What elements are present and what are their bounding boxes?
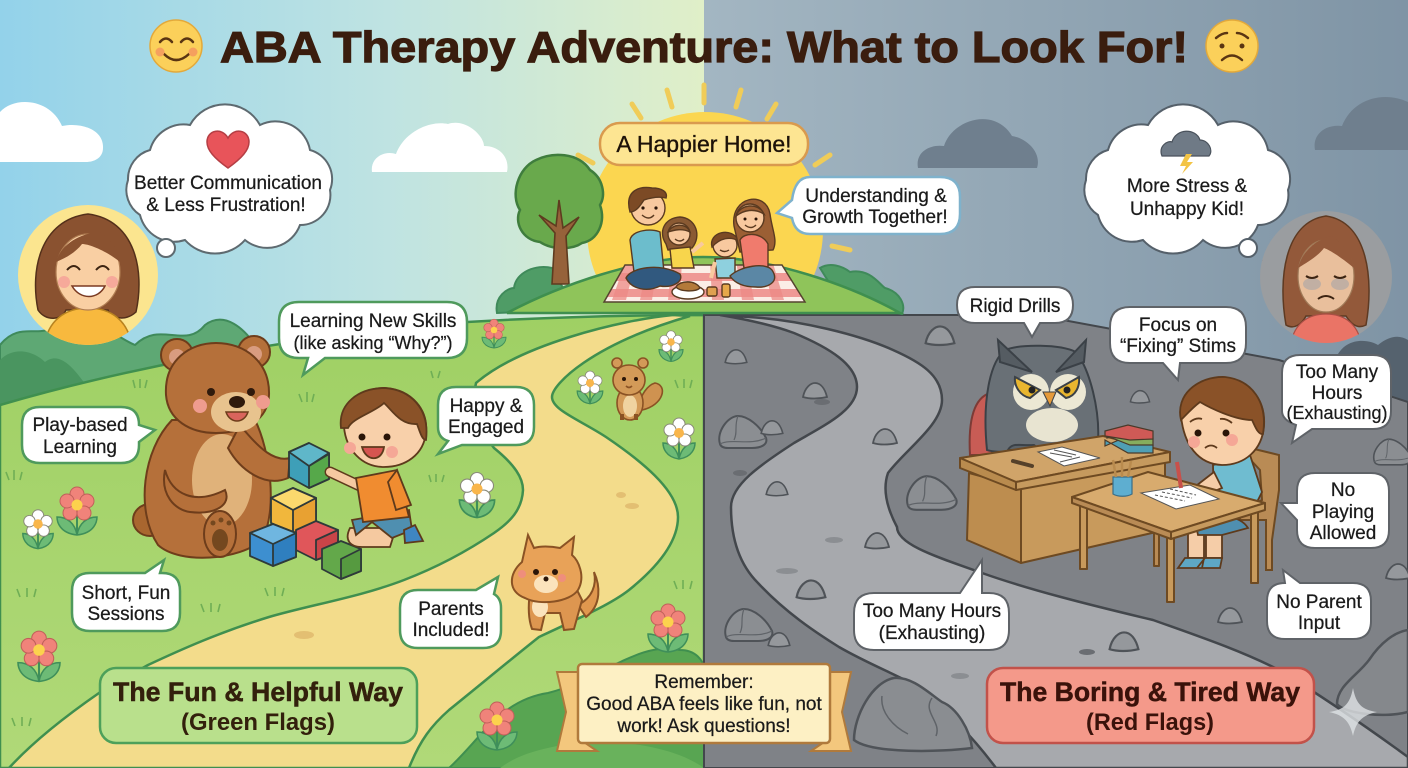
cloud: grey right	[1315, 97, 1408, 150]
speech bubble: Too Many Hours (Exhausting) right	[1282, 355, 1391, 443]
character: stern owl	[986, 340, 1098, 452]
thought bubble: Better Communication: Better Communication	[134, 173, 322, 194]
banner: Remember callout: work! Ask questions!	[616, 716, 791, 737]
thought bubble: Better Communication: & Less Frustration!	[146, 195, 306, 216]
speech bubble: No Parent Input	[1267, 570, 1371, 639]
label: red flags: (Red Flags)	[1086, 709, 1214, 736]
speech bubble: Play-based Learning	[22, 407, 155, 463]
speech bubble: Too Many Hours (Exhausting) centre	[854, 560, 1009, 650]
icon: storm cloud	[1161, 131, 1211, 174]
speech bubble: No Playing Allowed: Playing	[1312, 502, 1374, 523]
speech bubble: Too Many Hours (Exhausting) right: Too Many	[1296, 362, 1379, 383]
speech bubble: No Parent Input: No Parent	[1276, 592, 1362, 613]
banner: A Happier Home!: A Happier Home!	[616, 131, 792, 157]
speech bubble: Understanding & Growth Together!: Understanding &	[805, 186, 947, 207]
rock: large bottom right	[1337, 630, 1408, 715]
mother	[730, 199, 775, 287]
tree	[516, 155, 603, 284]
speech bubble: Short, Fun Sessions	[72, 560, 180, 631]
speech bubble: No Playing Allowed	[1281, 473, 1389, 548]
speech bubble: Too Many Hours (Exhausting) centre: (Exhausting)	[879, 623, 985, 644]
little boy	[711, 232, 739, 278]
ground: green meadow	[0, 315, 704, 768]
thought bubble: More Stress: More Stress &	[1127, 176, 1248, 197]
papers and pencil on desk	[1013, 447, 1100, 466]
family picnic	[626, 188, 775, 299]
ground: stony grey ground	[704, 315, 1408, 768]
cloud: large white left	[0, 102, 103, 162]
small student chair	[1240, 447, 1279, 570]
bushes: left background	[0, 316, 300, 420]
icon: worried emoji	[1206, 20, 1258, 72]
thought bubble: More Stress	[1084, 104, 1290, 267]
speech bubble: Learning New Skills	[279, 302, 467, 375]
speech bubble: Understanding & Growth Together!	[777, 177, 960, 234]
speech bubble: No Parent Input: Input	[1298, 613, 1341, 634]
flowers on the meadow	[18, 319, 695, 750]
character: brown bear	[133, 336, 290, 558]
speech bubble: Play-based Learning: Learning	[43, 437, 117, 458]
girl	[662, 217, 703, 268]
picnic food	[672, 282, 730, 299]
speech bubble: Play-based Learning: Play-based	[32, 415, 128, 436]
path: yellow sandy road	[9, 315, 690, 768]
speech bubble: Too Many Hours (Exhausting) right: Hours	[1312, 383, 1362, 404]
speech bubble: Learning New Skills: Learning New Skills	[290, 311, 456, 332]
background: sunny sky	[0, 0, 704, 768]
cloud: grey centre	[918, 119, 1038, 168]
speech bubble: Parents Included!: Included!	[412, 620, 490, 641]
label: red flags	[987, 668, 1314, 743]
speech bubble: No Playing Allowed: Allowed	[1310, 523, 1376, 544]
speech bubble: Focus on "Fixing" Stims: “Fixing” Stims	[1120, 336, 1236, 357]
speech bubble: Understanding & Growth Together!: Growth Together!	[802, 207, 948, 228]
speech bubble: No Playing Allowed: No	[1331, 480, 1355, 501]
portrait: sad mom	[1260, 211, 1392, 350]
icon: smiling emoji	[150, 20, 202, 72]
banner: Remember callout: Remember:	[654, 672, 754, 693]
stack of books	[1105, 425, 1153, 453]
character: happy boy	[330, 388, 427, 547]
background: stormy sky	[704, 0, 1408, 768]
speech bubble: Happy & Engaged	[438, 387, 534, 454]
hill: bushes behind hilltop	[497, 265, 903, 314]
thought bubble: More Stress: Unhappy Kid!	[1130, 199, 1244, 220]
banner: Remember callout: Good ABA feels like fun, not	[586, 694, 822, 715]
speech bubble: Too Many Hours (Exhausting) centre: Too Many Hours	[863, 601, 1001, 622]
sun and rays	[576, 82, 852, 275]
bushes: bottom right of meadow	[449, 648, 704, 768]
speech bubble: Focus on "Fixing" Stims: Focus on	[1139, 315, 1217, 336]
icon: red heart	[207, 131, 249, 168]
small student desk	[1072, 472, 1265, 602]
cloud: white centre	[372, 123, 508, 172]
speech bubble: Rigid Drills: Rigid Drills	[970, 296, 1060, 317]
title: ABA Therapy Adventure: What to Look For!	[220, 23, 1188, 72]
thought bubble: Better Communication	[126, 104, 332, 268]
picnic blanket	[600, 260, 810, 302]
rocks and pebbles on the stony path	[719, 326, 1408, 679]
rock: large bottom centre	[854, 678, 972, 751]
sparkle watermark	[1329, 688, 1377, 736]
speech bubble: Short, Fun Sessions: Sessions	[87, 604, 165, 625]
label: red flags: The Boring & Tired Way	[1000, 677, 1300, 707]
character: puppy	[512, 535, 598, 630]
speech bubble: Too Many Hours (Exhausting) right: (Exhausting)	[1286, 403, 1388, 423]
banner: A Happier Home!	[600, 123, 808, 165]
character: sad boy	[1178, 377, 1264, 568]
speech bubble: Rigid Drills	[957, 287, 1073, 337]
portrait: happy mom	[18, 205, 158, 350]
character: squirrel	[612, 358, 662, 420]
large teacher desk	[960, 436, 1170, 563]
character: owl's red chair	[970, 393, 992, 455]
bushes: right background	[1300, 337, 1408, 420]
worksheet, pencil and pencil cup	[1113, 457, 1219, 509]
speech bubble: Parents Included!	[400, 577, 501, 648]
speech bubble: Happy & Engaged: Engaged	[448, 417, 524, 438]
label: green flags	[100, 668, 417, 743]
father	[626, 188, 681, 289]
speech bubble: Learning New Skills: (like asking “Why?”)	[293, 333, 453, 353]
label: green flags: (Green Flags)	[181, 709, 335, 736]
hill: centre green hill	[507, 257, 900, 313]
speech bubble: Happy & Engaged: Happy &	[450, 396, 523, 417]
toy blocks	[250, 443, 361, 579]
speech bubble: Focus on "Fixing" Stims	[1110, 307, 1246, 380]
label: green flags: The Fun & Helpful Way	[113, 677, 403, 707]
speech bubble: Parents Included!: Parents	[418, 599, 484, 620]
grass tufts	[6, 371, 692, 726]
speech bubble: Short, Fun Sessions: Short, Fun	[82, 583, 170, 604]
banner: Remember callout	[557, 664, 851, 751]
path: grey road	[720, 315, 1408, 768]
